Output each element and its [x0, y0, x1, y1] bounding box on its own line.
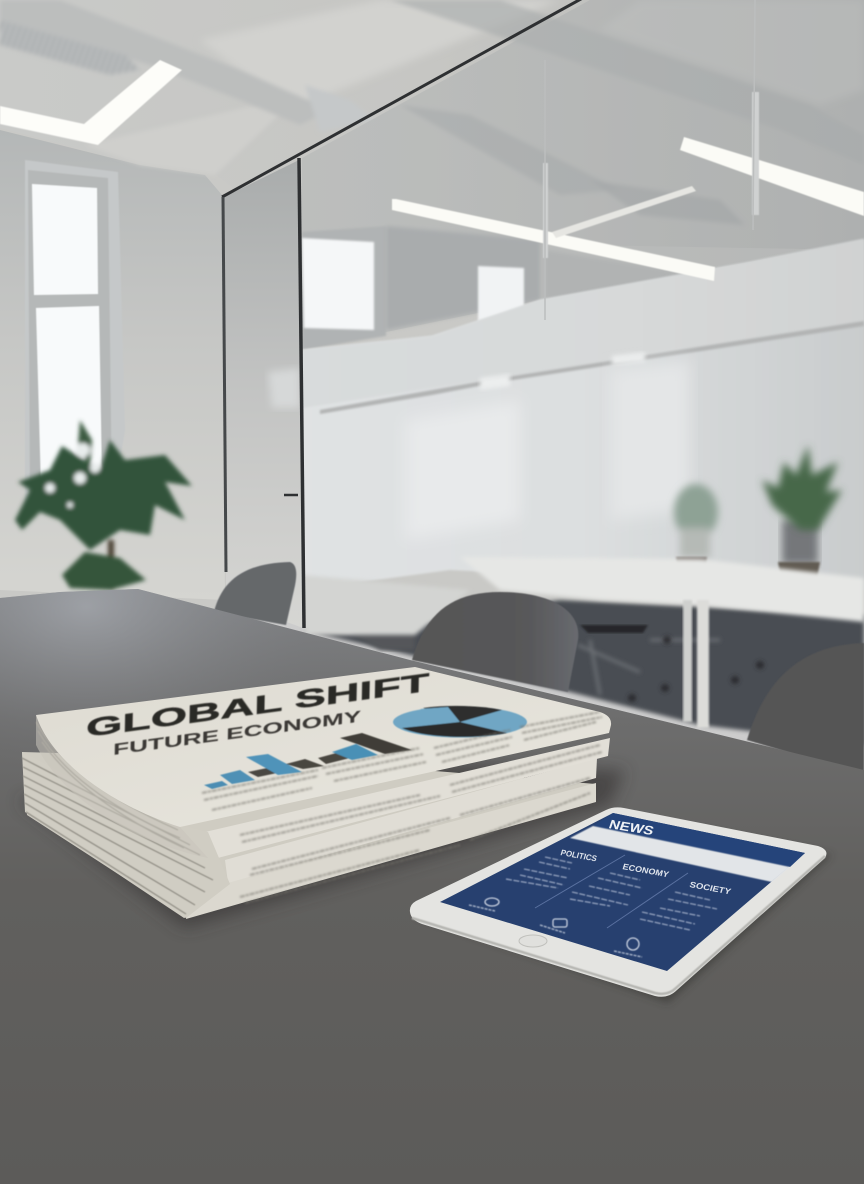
ceiling light panel	[0, 60, 182, 145]
newspaper body text	[202, 712, 602, 903]
newspaper shadow	[18, 760, 625, 928]
door frame	[222, 0, 755, 628]
tablet columns	[559, 848, 733, 896]
plants behind frosted glass	[492, 445, 842, 584]
tablet white strip	[570, 826, 790, 882]
stack sheets	[22, 715, 610, 919]
tablet shadow	[415, 830, 832, 1003]
chairs	[214, 562, 864, 775]
glass door panel	[224, 160, 303, 628]
tablet header band	[593, 813, 805, 867]
newspaper stack	[22, 667, 611, 919]
tablet icons	[469, 898, 642, 957]
tablet body lines	[506, 857, 717, 930]
NEWS logo: NEWS	[607, 817, 656, 838]
tablet screen	[440, 813, 805, 971]
window: left wall	[25, 160, 125, 510]
desk behind glass	[302, 557, 864, 745]
table surface	[0, 589, 864, 1184]
tablet body	[410, 807, 826, 997]
tablet	[410, 807, 832, 1003]
tablet columns: ECONOMY	[621, 862, 671, 879]
glass partition	[268, 0, 864, 590]
tablet columns: POLITICS	[559, 848, 599, 864]
headline: GLOBAL SHIFT	[86, 669, 431, 743]
plant: left potted plant	[15, 420, 192, 590]
subheading: FUTURE ECONOMY	[113, 708, 362, 759]
ceiling vent	[0, 0, 864, 225]
ceiling light strips	[392, 92, 864, 281]
tablet home button	[519, 935, 547, 947]
bar chart	[204, 733, 412, 789]
top front page	[36, 667, 611, 827]
tablet columns: SOCIETY	[688, 880, 733, 896]
pie chart	[393, 706, 527, 738]
background: office wall and ceiling	[0, 0, 864, 620]
